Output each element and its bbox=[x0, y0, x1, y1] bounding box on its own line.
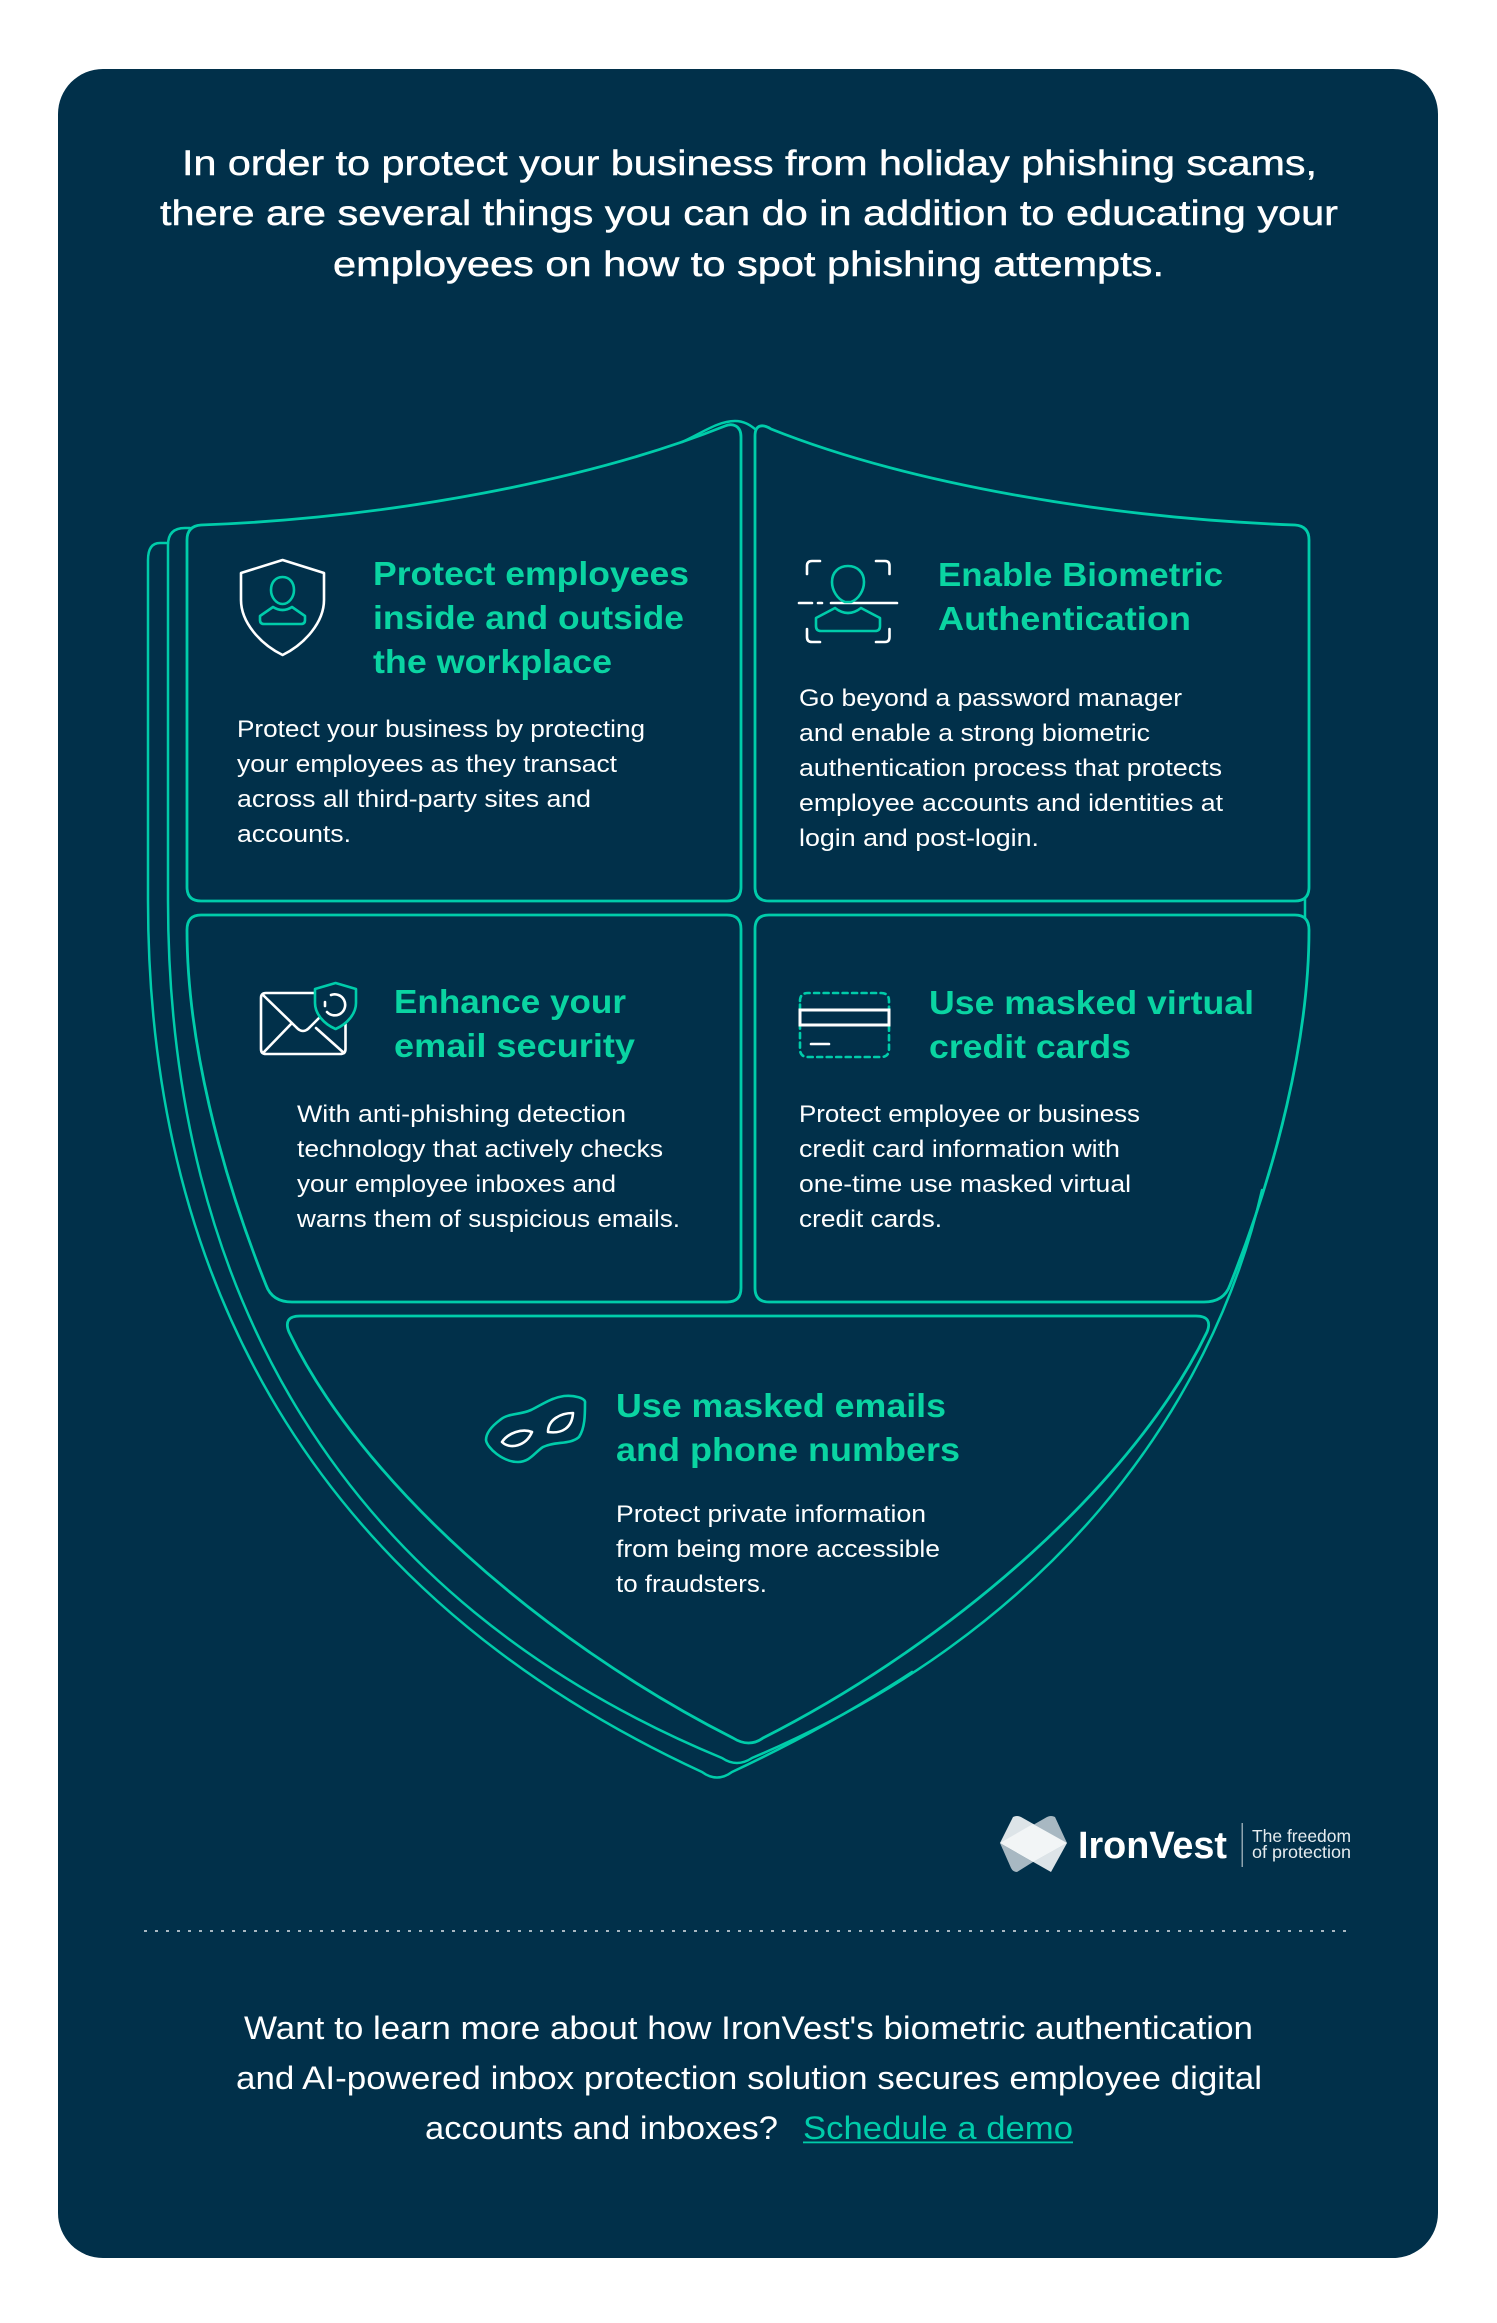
text: call to action: Want to learn more about how IronVest's biometric authentication bbox=[244, 2010, 1253, 2046]
text: protect employees body: Protect your business by protecting bbox=[237, 716, 645, 743]
text: masked emails and phone numbers body bbox=[616, 1501, 940, 1598]
heading: masked emails and phone numbers: and phone numbers bbox=[616, 1431, 960, 1468]
shield: middle back layer bbox=[168, 421, 1305, 1763]
card outline: protect employees bbox=[187, 425, 741, 901]
icon: IronVest mark bbox=[1000, 1816, 1067, 1872]
text: masked virtual credit cards body: one-time use masked virtual bbox=[799, 1171, 1131, 1198]
text: protect employees body: across all third-party sites and bbox=[237, 786, 591, 813]
text: biometric authentication body: login and post-login. bbox=[799, 825, 1039, 852]
logo tagline: of protection bbox=[1252, 1842, 1351, 1862]
text: masked emails and phone numbers body: from being more accessible bbox=[616, 1536, 940, 1563]
text: protect employees body bbox=[237, 716, 645, 848]
icon: shield with person bbox=[241, 560, 324, 655]
text: email security body: technology that actively checks bbox=[297, 1136, 663, 1163]
card outline: masked emails and phone numbers bbox=[287, 1316, 1209, 1743]
icon: credit card bbox=[800, 993, 889, 1057]
heading: masked emails and phone numbers: Use masked emails bbox=[616, 1387, 946, 1424]
text: call to action: accounts and inboxes? bbox=[425, 2110, 778, 2146]
heading: email security: email security bbox=[394, 1027, 636, 1064]
icon: envelope with shield bbox=[261, 983, 356, 1054]
text: call to action bbox=[236, 2010, 1262, 2146]
text: masked virtual credit cards body bbox=[799, 1101, 1140, 1233]
text: biometric authentication body: employee accounts and identities at bbox=[799, 790, 1223, 817]
text: biometric authentication body: authentication process that protects bbox=[799, 755, 1222, 782]
heading: biometric authentication: Enable Biometric bbox=[938, 556, 1223, 593]
panel: masked virtual credit cards bbox=[755, 915, 1309, 1302]
text: email security body bbox=[296, 1101, 680, 1233]
heading: intro paragraph: In order to protect your business from holiday phishing scams, bbox=[182, 144, 1317, 183]
heading: email security: Enhance your bbox=[394, 983, 626, 1020]
text: biometric authentication body: and enable a strong biometric bbox=[799, 720, 1150, 747]
panel: biometric authentication bbox=[755, 426, 1309, 901]
text: masked virtual credit cards body: credit cards. bbox=[799, 1206, 942, 1233]
heading: protect employees: the workplace bbox=[373, 643, 612, 680]
heading: intro paragraph: there are several things you can do in addition to educating your bbox=[160, 194, 1338, 233]
heading: protect employees: inside and outside bbox=[373, 599, 684, 636]
heading: intro paragraph: employees on how to spot phishing attempts. bbox=[333, 245, 1164, 284]
heading: biometric authentication bbox=[938, 556, 1223, 637]
card outline: masked virtual credit cards bbox=[755, 915, 1309, 1302]
shield: outer back layer bbox=[148, 543, 912, 1778]
text: protect employees body: your employees as they transact bbox=[237, 751, 617, 778]
text: masked emails and phone numbers body: to fraudsters. bbox=[616, 1571, 767, 1598]
text: masked virtual credit cards body: credit card information with bbox=[799, 1136, 1120, 1163]
icon: mask bbox=[486, 1396, 585, 1462]
link: schedule a demo: Schedule a demo bbox=[803, 2110, 1073, 2146]
heading: masked virtual credit cards bbox=[929, 984, 1254, 1065]
icon: face scan bbox=[799, 561, 897, 642]
text: masked virtual credit cards body: Protect employee or business bbox=[799, 1101, 1140, 1128]
text: call to action: and AI-powered inbox protection solution secures employee digital bbox=[236, 2060, 1262, 2096]
heading: masked virtual credit cards: Use masked virtual bbox=[929, 984, 1254, 1021]
panel: email security bbox=[187, 915, 741, 1302]
heading: protect employees bbox=[373, 555, 689, 680]
text: email security body: With anti-phishing detection bbox=[297, 1101, 626, 1128]
heading: masked emails and phone numbers bbox=[616, 1387, 960, 1468]
card outline: biometric authentication bbox=[755, 426, 1309, 901]
logo wordmark: IronVest bbox=[1078, 1825, 1227, 1867]
text: protect employees body: accounts. bbox=[237, 821, 351, 848]
logo: IronVest bbox=[1000, 1816, 1351, 1872]
logo tagline bbox=[1252, 1826, 1351, 1862]
logo tagline: The freedom bbox=[1252, 1826, 1351, 1846]
text: email security body: your employee inboxes and bbox=[297, 1171, 616, 1198]
text: masked emails and phone numbers body: Protect private information bbox=[616, 1501, 926, 1528]
heading: email security bbox=[394, 983, 636, 1064]
heading: biometric authentication: Authentication bbox=[938, 600, 1191, 637]
heading: protect employees: Protect employees bbox=[373, 555, 689, 592]
heading: intro paragraph bbox=[160, 144, 1338, 284]
text: biometric authentication body: Go beyond a password manager bbox=[799, 685, 1182, 712]
text: email security body: warns them of suspicious emails. bbox=[296, 1206, 680, 1233]
text: biometric authentication body bbox=[799, 685, 1223, 852]
heading: masked virtual credit cards: credit cards bbox=[929, 1028, 1131, 1065]
panel: protect employees bbox=[187, 425, 741, 901]
card outline: email security bbox=[187, 915, 741, 1302]
panel: masked emails and phone numbers bbox=[287, 1316, 1209, 1743]
